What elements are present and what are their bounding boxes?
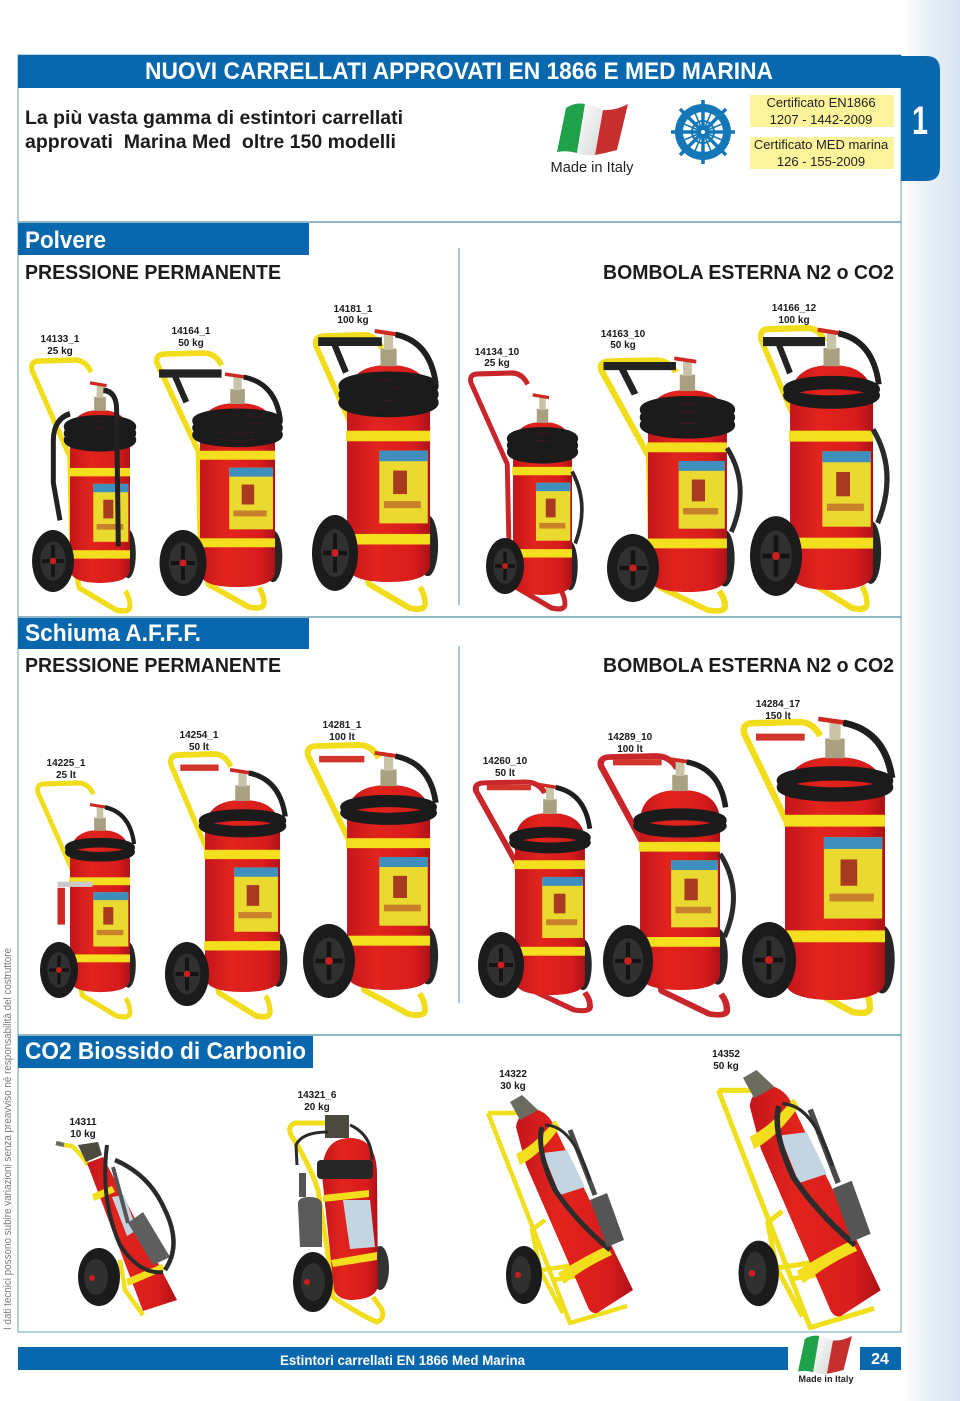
- label 14164_1: 14164_1: [172, 326, 210, 337]
- intro text: approvati Marina Med oltre 150 modelli: [25, 131, 396, 153]
- extinguisher 14289_10: [601, 756, 733, 1015]
- label 14166_12: 14166_12: [772, 303, 816, 314]
- chapter tab with number 1: 1: [912, 99, 928, 143]
- chapter tab with number 1: [901, 56, 940, 181]
- label 14164_1: 50 kg: [178, 338, 204, 349]
- right side background strip: [905, 0, 960, 1401]
- label 14322: 14322: [499, 1069, 527, 1080]
- label 14322: 30 kg: [500, 1081, 526, 1092]
- section: Schiuma A.F.F.F.: PRESSIONE PERMANENTE: [25, 655, 281, 677]
- extinguisher 14163_10: [601, 358, 740, 611]
- section: Schiuma A.F.F.F.: [18, 617, 901, 1003]
- extinguisher 14281_1: [303, 745, 438, 1015]
- certification box MED marina: 126 - 155-2009: [777, 154, 865, 169]
- section: CO2 Biossido di Carbonio: CO2 Biossido di Carbonio: [25, 1038, 306, 1065]
- extinguisher 14321_6: [290, 1115, 389, 1322]
- label 14284_17: 150 lt: [765, 711, 791, 722]
- label 14311: 10 kg: [70, 1129, 96, 1140]
- section: Polvere: [18, 222, 901, 605]
- section: Polvere: PRESSIONE PERMANENTE: [25, 262, 281, 284]
- made in Italy flag: Made in Italy: [550, 160, 634, 176]
- label 14163_10: 50 kg: [610, 340, 636, 351]
- extinguisher 14254_1: [165, 754, 287, 1017]
- extinguisher 14133_1: [32, 360, 136, 611]
- extinguisher 14225_1: [38, 783, 136, 1017]
- certification box EN1866: 1207 - 1442-2009: [770, 112, 872, 127]
- made in Italy flag: [550, 104, 634, 176]
- extinguisher 14166_12: [750, 328, 887, 609]
- icon: ship wheel: [671, 100, 735, 164]
- label 14254_1: 50 lt: [189, 742, 210, 753]
- section: Schiuma A.F.F.F.: Schiuma A.F.F.F.: [25, 620, 201, 647]
- label 14166_12: 100 kg: [778, 315, 810, 326]
- label 14284_17: 14284_17: [756, 699, 800, 710]
- label 14225_1: 25 lt: [56, 770, 77, 781]
- extinguisher 14181_1: [312, 331, 438, 609]
- footer flag: [798, 1336, 854, 1384]
- label 14133_1: 14133_1: [41, 334, 79, 345]
- label 14289_10: 14289_10: [608, 732, 652, 743]
- label 14352: 14352: [712, 1049, 740, 1060]
- intro text: [25, 107, 403, 153]
- section: Schiuma A.F.F.F.: BOMBOLA ESTERNA N2 o CO2: [603, 655, 894, 677]
- label 14260_10: 50 lt: [495, 768, 516, 779]
- page number: [860, 1347, 901, 1370]
- label 14181_1: 100 kg: [337, 315, 369, 326]
- section: Polvere: BOMBOLA ESTERNA N2 o CO2: [603, 262, 894, 284]
- page number: 24: [871, 1351, 889, 1368]
- certification box EN1866: Certificato EN1866: [766, 95, 876, 110]
- footer bar: [18, 1347, 788, 1370]
- extinguisher 14311: [56, 1142, 177, 1315]
- extinguisher 14322: [488, 1095, 633, 1323]
- label 14254_1: 14254_1: [180, 730, 218, 741]
- footer bar: Estintori carrellati EN 1866 Med Marina: [280, 1353, 525, 1368]
- label 14321_6: 14321_6: [298, 1090, 336, 1101]
- label 14163_10: 14163_10: [601, 329, 645, 340]
- extinguisher 14164_1: [157, 353, 282, 608]
- extinguisher 14134_10: [471, 373, 582, 609]
- extinguisher 14284_17: [742, 719, 895, 1013]
- extinguisher 14260_10: [476, 782, 592, 1011]
- certification box MED marina: Certificato MED marina: [754, 137, 889, 152]
- certification box MED marina: [750, 137, 894, 169]
- label 14281_1: 100 lt: [329, 732, 355, 743]
- label 14352: 50 kg: [713, 1061, 739, 1072]
- label 14260_10: 14260_10: [483, 756, 527, 767]
- label 14181_1: 14181_1: [334, 304, 372, 315]
- section: CO2 Biossido di Carbonio: [18, 1035, 901, 1068]
- section: Polvere: Polvere: [25, 227, 106, 254]
- label 14134_10: 25 kg: [484, 358, 510, 369]
- label 14281_1: 14281_1: [323, 720, 361, 731]
- extinguisher 14352: [718, 1070, 881, 1328]
- title bar: NUOVI CARRELLATI APPROVATI EN 1866 E MED MARINA: [145, 58, 773, 85]
- label 14311: 14311: [69, 1117, 97, 1128]
- label 14133_1: 25 kg: [47, 346, 73, 357]
- label 14134_10: 14134_10: [475, 347, 519, 358]
- footer flag: Made in Italy: [798, 1374, 854, 1384]
- label 14225_1: 14225_1: [47, 758, 85, 769]
- vertical disclaimer: I dati tecnici possono subire variazioni senza preavviso né responsabilità del costruttore: [2, 948, 14, 1330]
- title bar: [18, 55, 901, 88]
- label 14289_10: 100 lt: [617, 744, 643, 755]
- label 14321_6: 20 kg: [304, 1102, 330, 1113]
- certification box EN1866: [750, 95, 894, 127]
- intro text: La più vasta gamma di estintori carrellati: [25, 107, 403, 129]
